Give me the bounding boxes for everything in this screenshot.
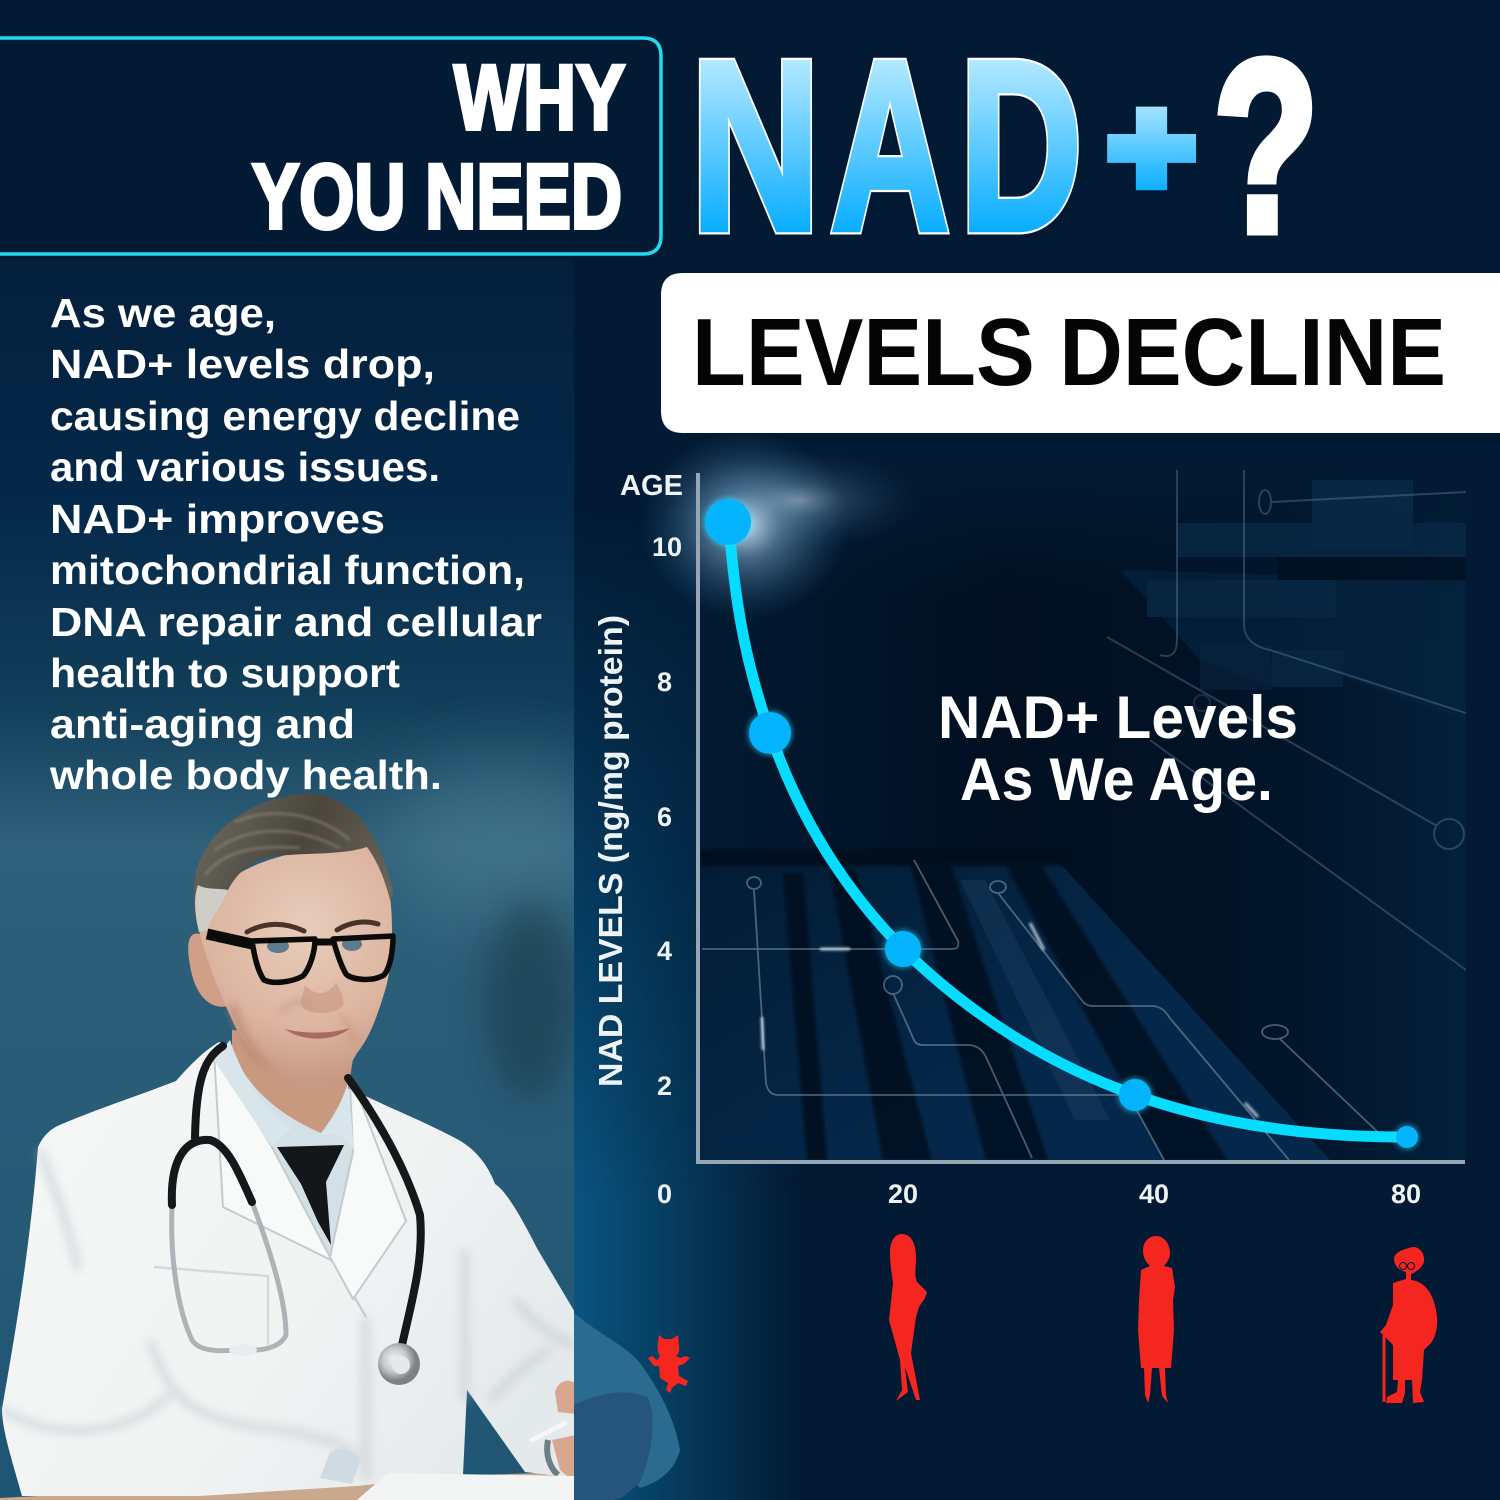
mouth [285,1028,350,1039]
ear [188,933,230,1007]
text block: explanation: whole body health. [49,752,442,798]
axis labels [620,470,1421,1209]
circuit lines [702,860,1383,1160]
chart backdrop patterns [700,470,1466,1160]
doctor illustration [0,794,576,1500]
text block: explanation: DNA repair and cellular [50,599,542,645]
lower left stripes [700,850,1330,1160]
pen [532,1423,565,1440]
cuff shadow [547,1440,558,1475]
hair [194,794,393,932]
axis labels: 6 [657,802,672,832]
banner: levels decline: LEVELS DECLINE [692,299,1446,406]
coat body [2,1042,576,1496]
glasses [207,934,393,982]
decline curve [729,523,1407,1137]
heading: NAD+?: ? [1213,9,1319,283]
banner: levels decline [661,273,1500,433]
axis labels: 2 [657,1071,672,1101]
text block: explanation: anti-aging and [50,701,355,747]
heading: NAD+?: A [831,12,949,281]
icon: elderly woman [1380,1247,1437,1403]
chart glow [640,430,920,620]
heading: NAD+?: N [691,12,820,281]
panel: title box [0,38,661,254]
hair strands [205,814,350,875]
tie [277,1145,344,1245]
lapels [214,1052,406,1317]
line highlights [762,923,1258,1117]
eyes [267,940,362,953]
heading: NAD+?: A [831,12,949,281]
shirt collar [214,1040,354,1150]
upper right bands [1120,480,1466,690]
text block: explanation: NAD+ improves [50,496,385,542]
heading: NAD+? [691,9,1319,283]
coat shading folds [2,1150,574,1480]
heading: why you need: WHY [454,47,625,149]
heading: NAD+?: N [691,12,820,281]
neck [232,1030,356,1133]
heading: why you need [252,47,625,248]
chart title: NAD+ Levels [938,684,1298,751]
shirt [244,1073,352,1254]
stethoscope [172,1046,421,1351]
chart title: As We Age. [960,746,1273,813]
axis labels: 20 [888,1179,918,1209]
heading: NAD+?: D [960,12,1082,281]
pocket [154,1267,268,1345]
panel: left background with doctor photo [0,260,610,1500]
face shading [228,1000,353,1075]
chart title [938,684,1298,813]
face [199,847,392,1087]
heading: NAD+?: + [1108,71,1194,224]
text block: explanation: As we age, [50,290,276,336]
axis labels: 8 [657,667,672,697]
left cuff [320,1449,360,1484]
axis labels: 40 [1139,1179,1169,1209]
axis labels: 0 [657,1179,672,1209]
text block: explanation: causing energy decline [50,393,520,439]
heading: NAD+?: D [960,12,1082,281]
icon: child [648,1335,690,1393]
hand [552,1380,574,1476]
axis labels: 80 [1391,1179,1421,1209]
icon: young woman [889,1234,927,1401]
paper [357,1473,575,1500]
data point halos [704,498,1419,1149]
line chart: NAD+ levels by age [592,430,1465,1209]
axes [698,473,1465,1162]
icons: life stages [648,1234,1437,1403]
heading: why you need: YOU NEED [252,146,622,248]
nose [301,982,343,1013]
text block: explanation: NAD+ levels drop, [50,341,435,387]
chest piece [378,1343,420,1385]
axis labels: AGE [620,470,683,502]
hand under translucent overlay [574,1392,653,1500]
text block: explanation: mitochondrial function, [50,547,525,593]
icon: middle-aged woman [1138,1236,1175,1403]
eyebrows [247,922,378,932]
text block: explanation: and various issues. [50,444,440,490]
arm under translucent overlay [574,1313,680,1488]
data points [705,499,1418,1148]
y axis title: NAD LEVELS (ng/mg protein) [592,615,629,1087]
axis labels: 4 [657,936,672,966]
table [0,1472,575,1500]
text block: explanation: health to support [50,650,400,696]
axis labels: 10 [652,532,682,562]
text block: explanation [49,290,542,798]
grey temple [195,885,228,932]
stethoscope earpieces [229,1344,257,1356]
stethoscope metal tubes [172,1202,286,1351]
panel: chart background [574,470,1466,1500]
